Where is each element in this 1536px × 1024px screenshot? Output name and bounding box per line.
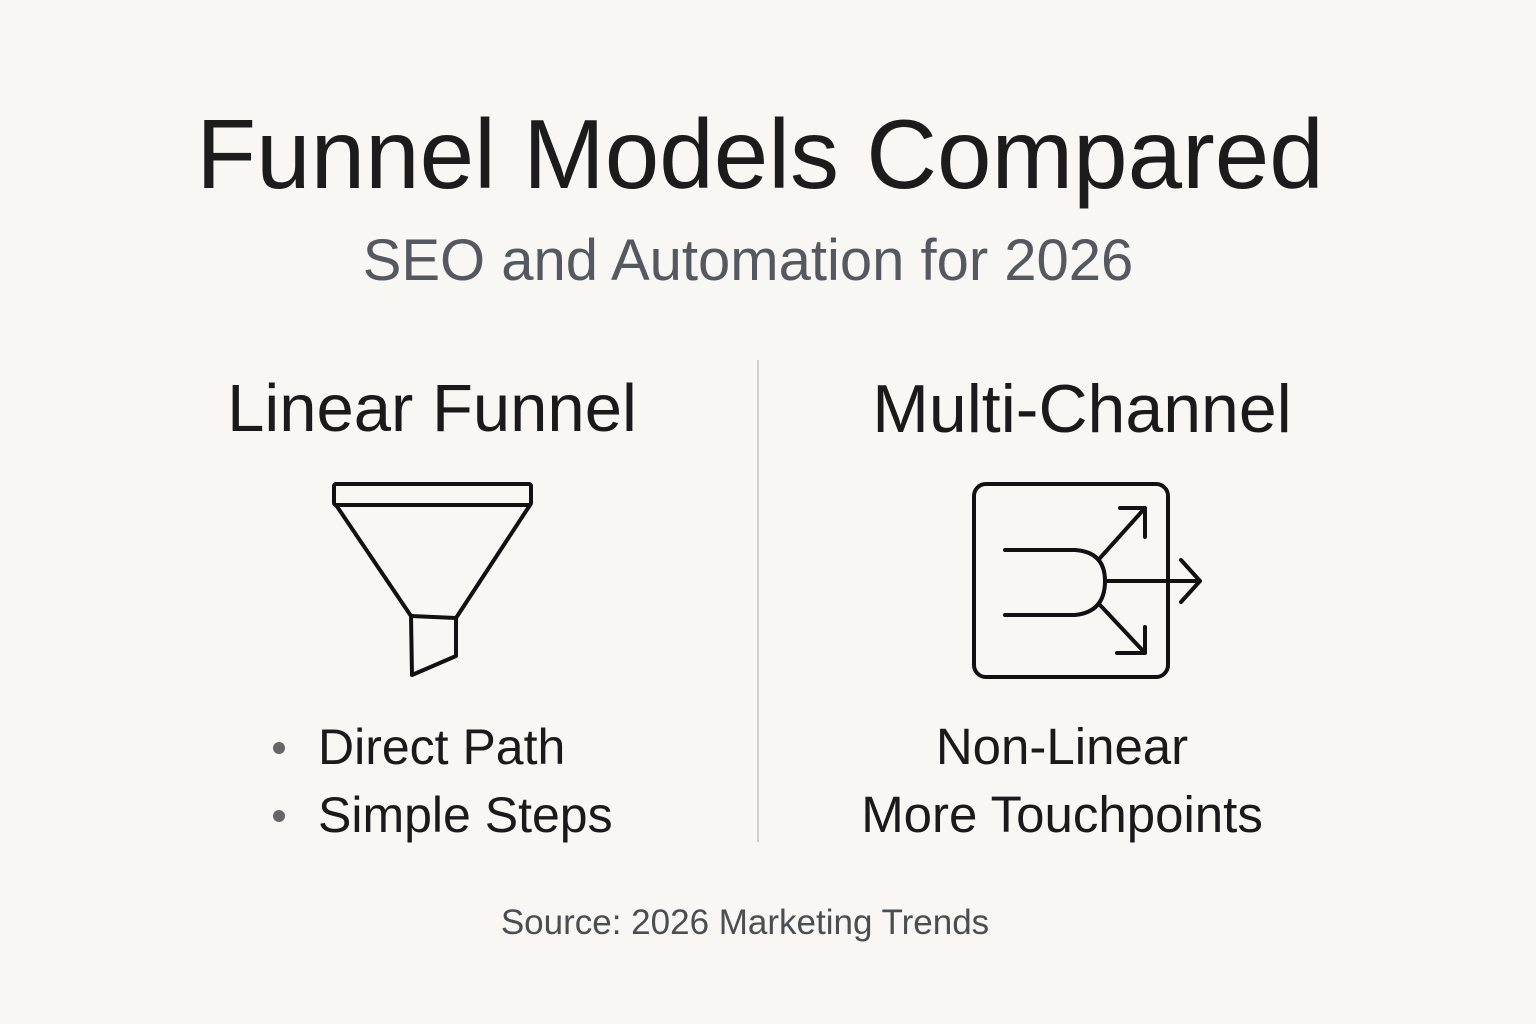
bullet list [273,719,613,843]
bullet list: Direct Path [318,719,565,775]
text: descriptors [861,718,1263,843]
subtitle: SEO and Automation for 2026 [363,228,1133,293]
heading: Linear Funnel: Linear Funnel [227,371,637,446]
title: Funnel Models Compared [196,99,1324,209]
text: descriptors: Non-Linear [936,718,1188,775]
bullet list: Simple Steps [318,787,613,843]
heading: Multi-Channel: Multi-Channel [872,371,1292,447]
panel: linear funnel [227,371,637,843]
divider [757,360,759,842]
source note: Source: 2026 Marketing Trends [501,903,989,942]
text: descriptors: More Touchpoints [861,786,1263,843]
panel: multi-channel [861,371,1292,843]
icon: funnel [332,482,533,677]
icon: branching arrows [972,482,1202,679]
